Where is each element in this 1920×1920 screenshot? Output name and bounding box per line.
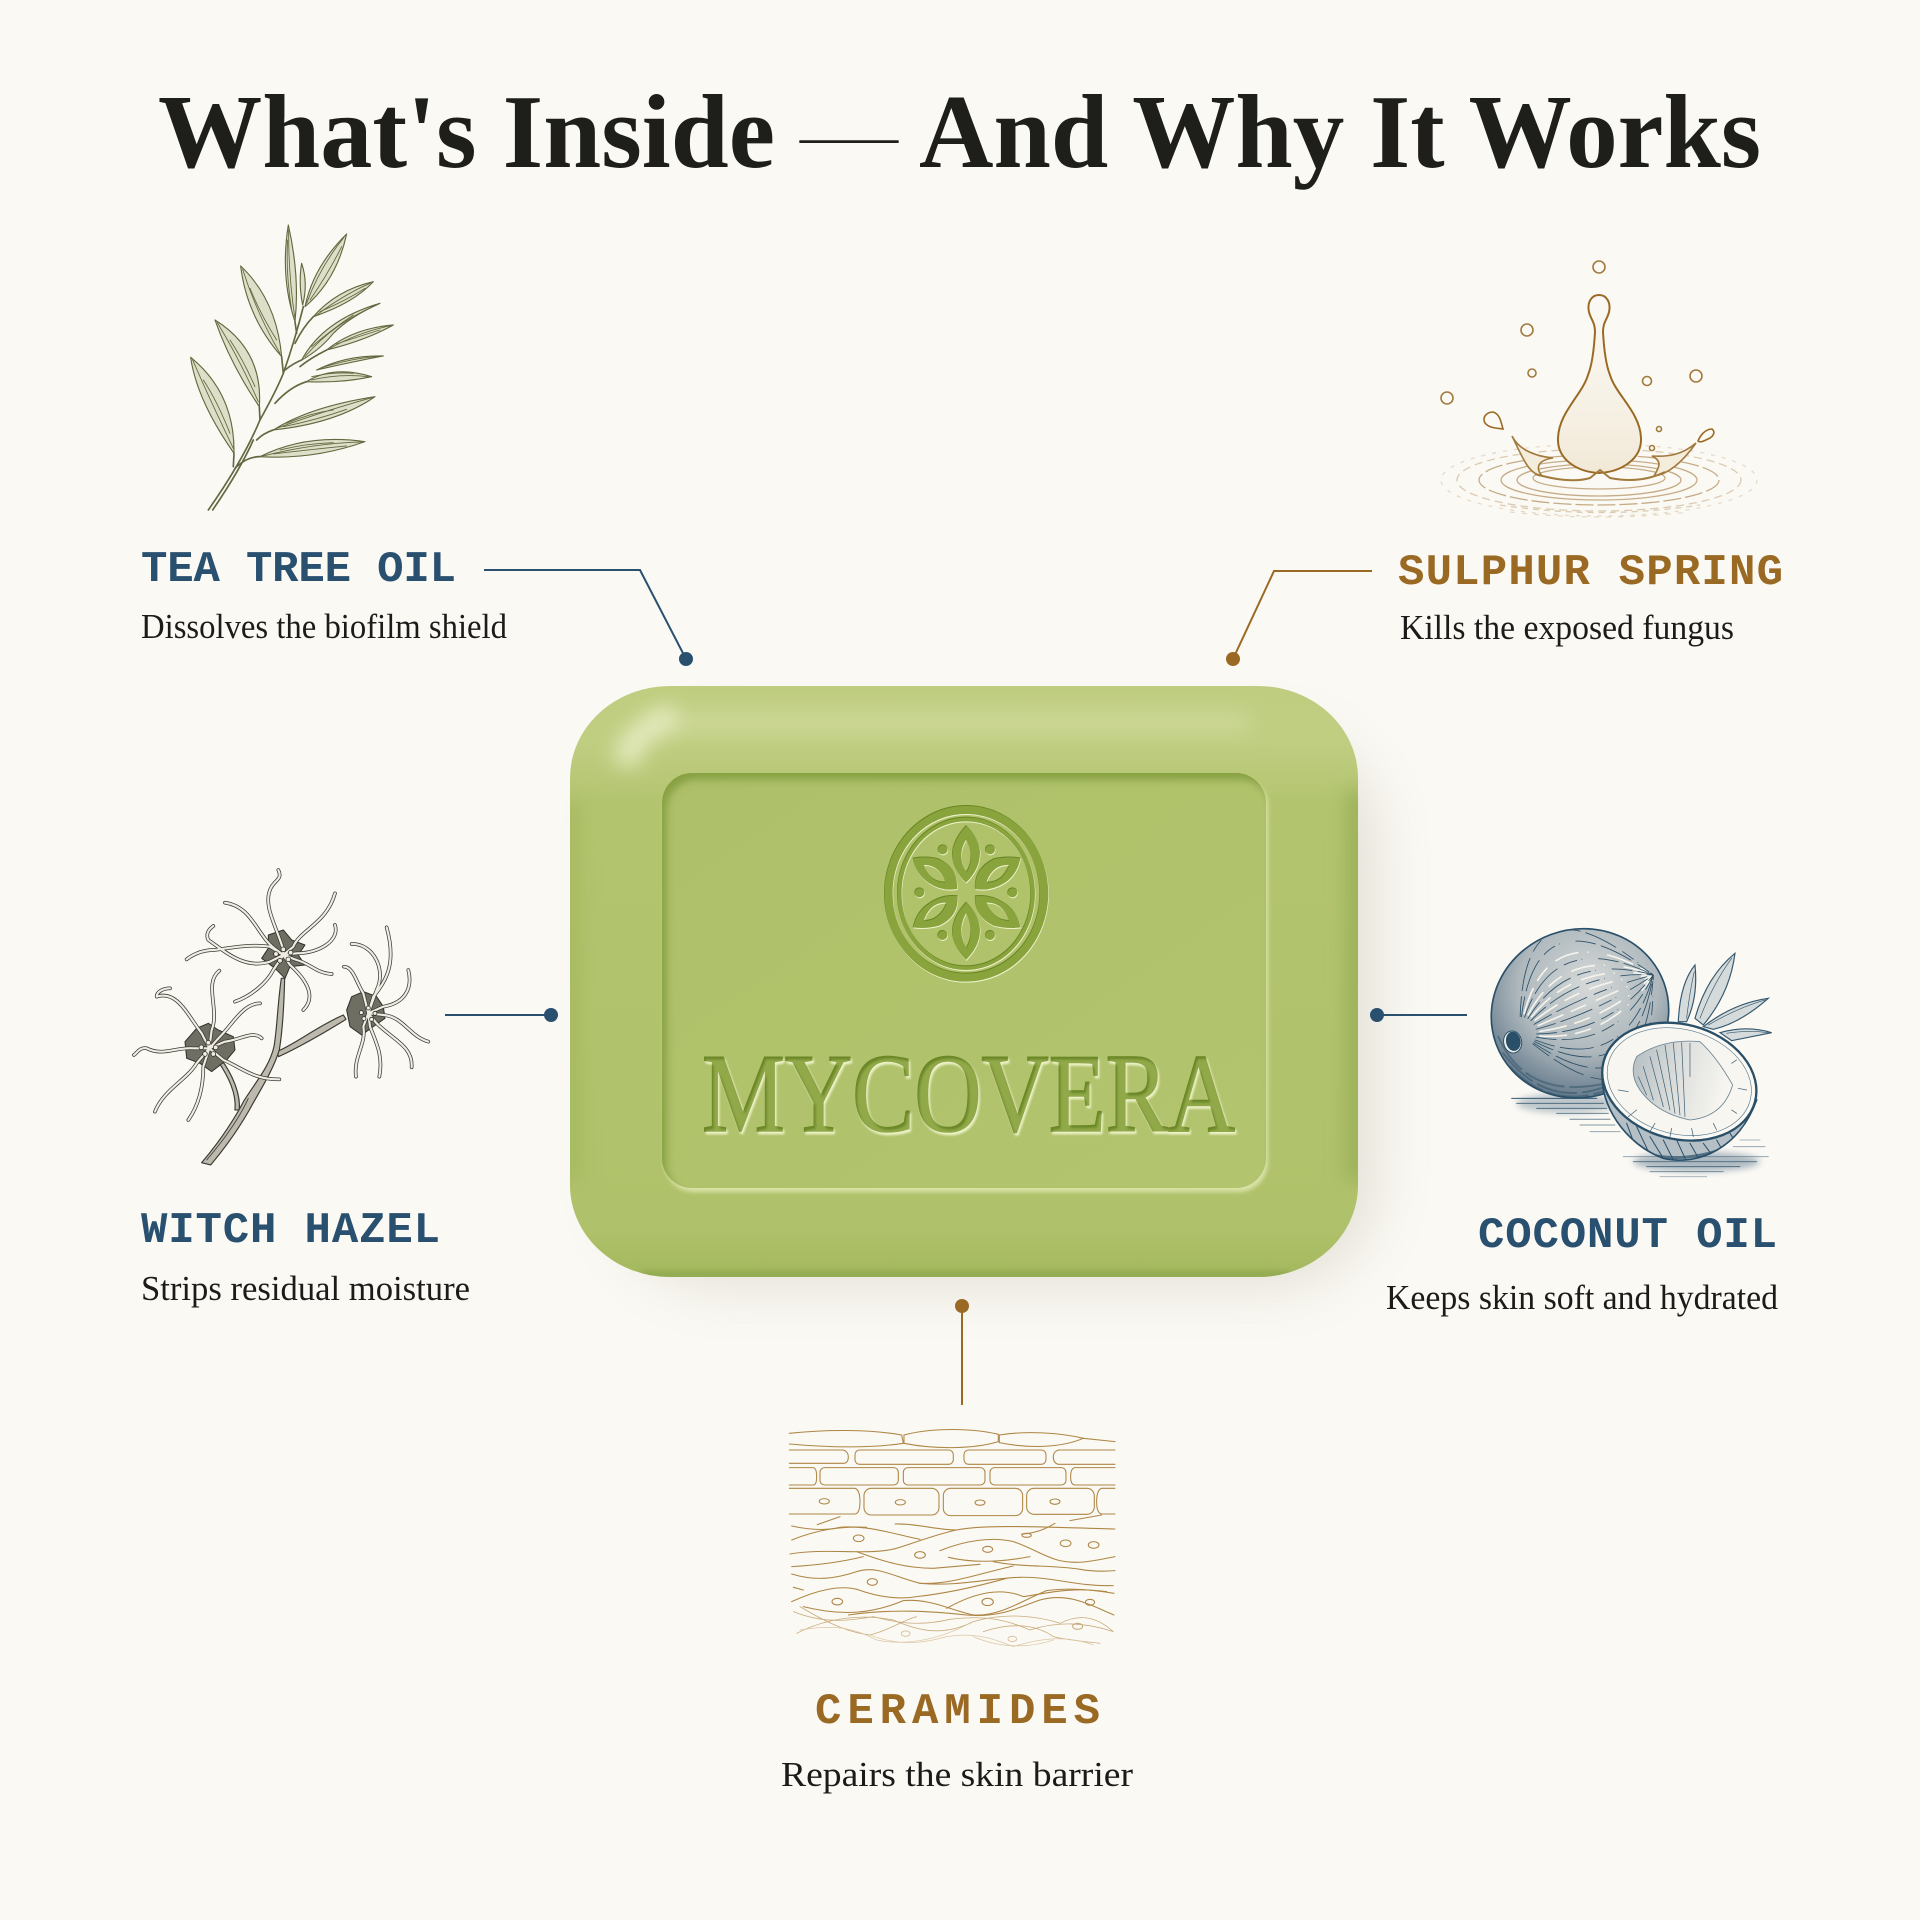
whole coconut	[1490, 928, 1670, 1099]
icon: skin barrier layers	[789, 1430, 1115, 1647]
label: ceramides: Repairs the skin barrier	[781, 1755, 1133, 1794]
icon: witch hazel sprig	[134, 870, 428, 1165]
label: sulphur spring	[1398, 548, 1783, 647]
label: coconut oil: Keeps skin soft and hydrated	[1386, 1278, 1778, 1317]
label: tea tree oil	[141, 545, 507, 646]
icon: sulphur drop splash	[1441, 261, 1757, 517]
connector: tea tree oil	[484, 570, 693, 666]
label: sulphur spring: SULPHUR SPRING	[1398, 548, 1783, 598]
connector: sulphur spring	[1226, 571, 1372, 666]
label: tea tree oil: TEA TREE OIL	[141, 545, 456, 595]
stems	[202, 978, 346, 1165]
title: And Why It Works	[919, 73, 1761, 190]
soap recessed panel	[662, 773, 1266, 1188]
title: —	[799, 107, 899, 167]
palm leaves	[1678, 953, 1772, 1041]
label: tea tree oil: Dissolves the biofilm shield	[141, 607, 507, 646]
label: ceramides: CERAMIDES	[815, 1687, 1100, 1737]
title	[158, 73, 1761, 190]
coconut eye	[1502, 1030, 1523, 1054]
soap body	[570, 686, 1358, 1277]
label: coconut oil: COCONUT OIL	[1478, 1211, 1777, 1261]
label: witch hazel: WITCH HAZEL	[141, 1206, 440, 1256]
petals fill	[134, 870, 428, 1120]
flower centres	[199, 947, 377, 1056]
label: coconut oil	[1386, 1211, 1778, 1317]
icon: tea tree branch	[191, 225, 393, 510]
coconut half	[1601, 1022, 1758, 1161]
label: witch hazel	[141, 1206, 470, 1308]
coconut shadow	[1512, 1093, 1768, 1177]
soap emblem	[884, 805, 1048, 982]
soap shadow	[610, 730, 1380, 1290]
soap lighting	[570, 716, 1358, 1275]
label: ceramides	[781, 1687, 1133, 1794]
title: What's Inside	[158, 73, 775, 190]
label: sulphur spring: Kills the exposed fungus	[1400, 608, 1734, 647]
soap bar	[570, 686, 1380, 1290]
connector: coconut oil	[1370, 1008, 1467, 1022]
soap brand name: MYCOVERA	[702, 1032, 1235, 1156]
icon: coconut	[1490, 928, 1772, 1178]
connector: witch hazel	[445, 1008, 558, 1022]
flower sepals	[185, 930, 385, 1072]
petals outline	[134, 870, 428, 1120]
connector: ceramides	[955, 1299, 969, 1405]
label: witch hazel: Strips residual moisture	[141, 1269, 470, 1308]
